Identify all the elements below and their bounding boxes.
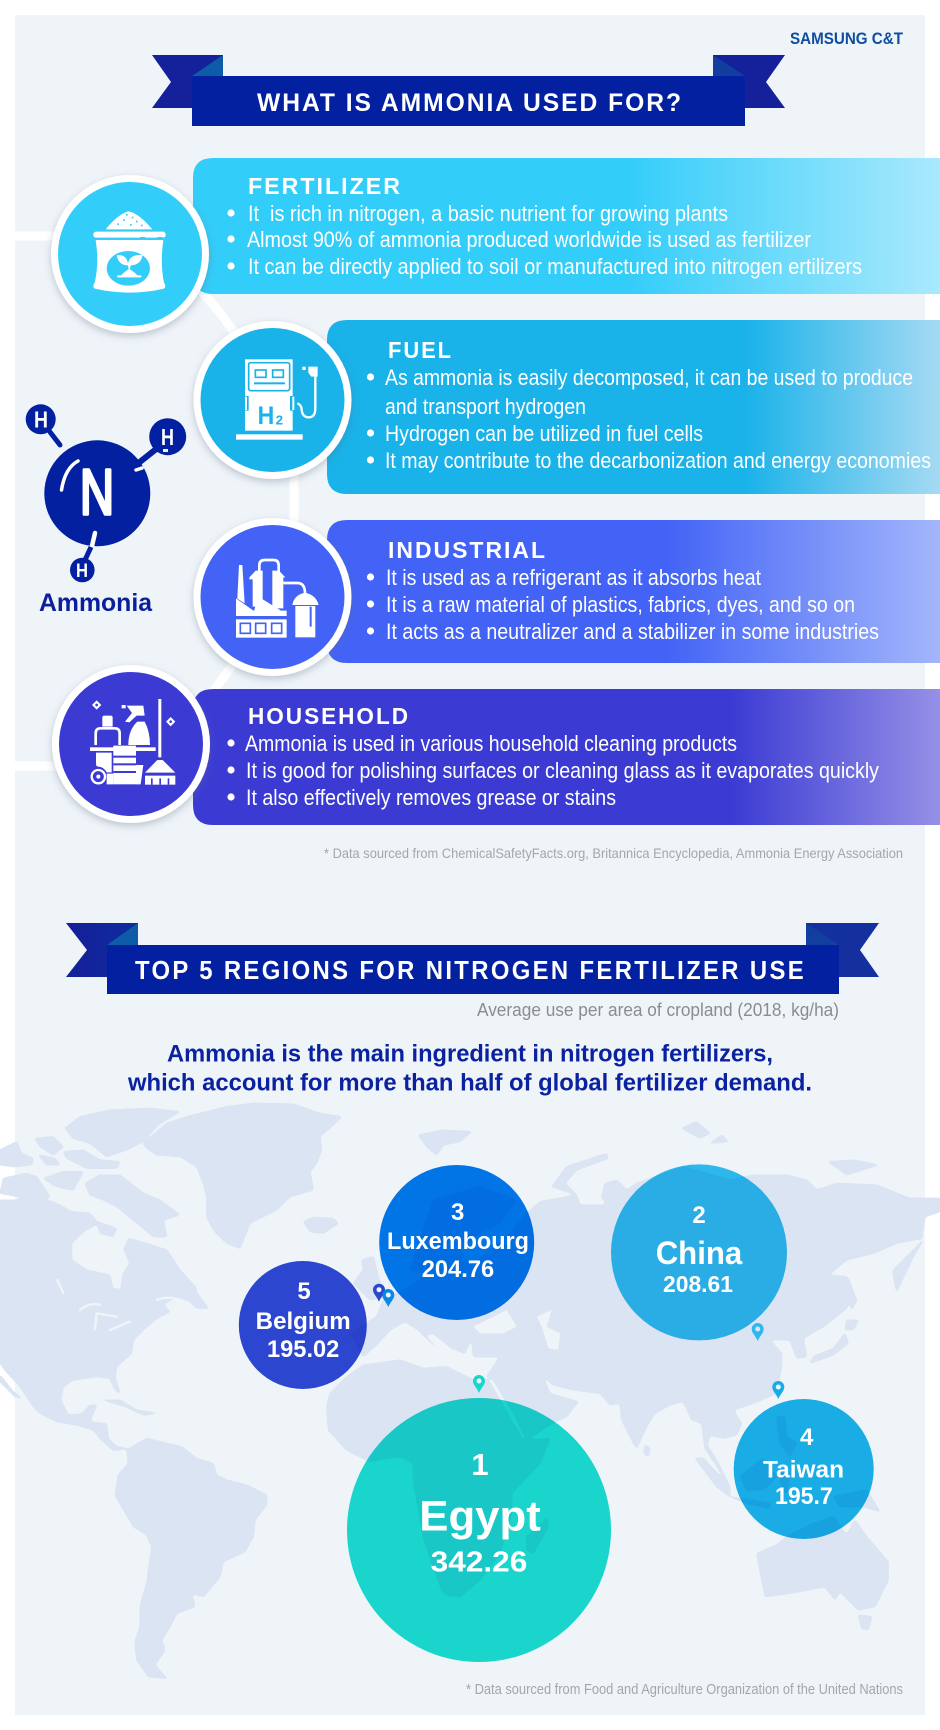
panel: household [193,689,940,825]
pin: belgium [373,1284,385,1302]
source note: uses: * Data sourced from ChemicalSafetyFacts.org, Britannica Encyclopedia, Ammonia Energy Association [324,845,903,861]
icon: ammonia molecule: H [34,406,48,432]
subtitle: Average use per area of cropland (2018, kg/ha) [477,1000,839,1020]
bubble: belgium: 5 [297,1278,311,1305]
panel: household: Ammonia is used in various household cleaning products [245,731,737,756]
bubble: taiwan [734,1399,874,1539]
bubble: china: 2 [692,1202,706,1229]
headline: Ammonia is the main ingredient in nitrogen fertilizers, [167,1040,773,1068]
icon: ammonia molecule: N [80,456,114,528]
panel: industrial: It is used as a refrigerant as it absorbs heat [386,565,761,590]
panel: household: HOUSEHOLD [248,703,410,729]
headline [127,1040,812,1096]
panel: fertilizer [193,158,940,294]
panel: household: It is good for polishing surfaces or cleaning glass as it evaporates quickly [246,758,879,783]
pin: luxembourg [382,1289,394,1307]
bubble: china: 208.61 [663,1271,733,1297]
bubble: china: China [656,1235,742,1271]
bubble: luxembourg: Luxembourg [387,1228,529,1255]
panel: fertilizer: Almost 90% of ammonia produced worldwide is used as fertilizer [247,227,811,252]
banner: what is ammonia used for: WHAT IS AMMONIA USED FOR? [257,89,683,117]
label: ammonia: Ammonia [39,589,153,617]
icon: ammonia molecule [26,404,186,582]
icon: hydrogen fuel pump [194,321,352,479]
panel: industrial: It is a raw material of plastics, fabrics, dyes, and so on [386,592,855,617]
headline: which account for more than half of global fertilizer demand. [127,1070,812,1096]
panel: fertilizer: It can be directly applied to soil or manufactured into nitrogen ertilizers [248,254,862,279]
panel: fuel [327,320,940,494]
icon: ammonia molecule: H [76,561,88,582]
panel: fuel: Hydrogen can be utilized in fuel cells [385,421,703,446]
bubble: luxembourg [379,1165,534,1320]
bubble: egypt [347,1398,611,1662]
bubble: taiwan: 195.7 [775,1483,833,1510]
panel: industrial: It acts as a neutralizer and a stabilizer in some industries [386,619,879,644]
bubble: belgium: Belgium [256,1308,351,1335]
brand logo: SAMSUNG C&T [790,29,904,48]
banner: top 5 regions: TOP 5 REGIONS FOR NITROGEN FERTILIZER USE [135,957,806,985]
world map [0,1103,940,1678]
panel: fertilizer: It is rich in nitrogen, a basic nutrient for growing plants [248,201,728,226]
panel: fertilizer: FERTILIZER [248,173,402,199]
panel: industrial: INDUSTRIAL [388,537,547,563]
panel: fuel: and transport hydrogen [385,394,586,419]
bubble: belgium: 195.02 [267,1336,339,1363]
panel: fuel: FUEL [388,337,453,363]
icon: hydrogen fuel pump: H [258,402,274,430]
pin: egypt [473,1375,485,1393]
icon: fertilizer bag [51,175,209,333]
bubble: china [611,1164,787,1340]
bubble: egypt: 342.26 [431,1547,527,1579]
bubble: luxembourg: 204.76 [422,1256,494,1283]
bubble: taiwan: Taiwan [763,1457,844,1484]
connector lines [15,236,294,766]
icon: ammonia molecule: H [161,424,174,450]
icon: household cleaning cart [52,665,210,823]
bubble: taiwan: 4 [800,1424,814,1451]
bubble: belgium [239,1261,367,1389]
banner: what is ammonia used for [152,55,785,126]
panel: industrial [327,520,940,663]
bubble: egypt: 1 [471,1447,489,1482]
banner: top 5 regions [66,923,879,994]
bubble: luxembourg: 3 [451,1199,464,1226]
pin: china [752,1323,764,1341]
panel: household: It also effectively removes grease or stains [246,785,616,810]
icon: industrial plant [194,518,352,676]
bubble: egypt: Egypt [419,1493,541,1541]
icon: hydrogen fuel pump: 2 [276,412,283,427]
pin: taiwan [772,1381,784,1399]
